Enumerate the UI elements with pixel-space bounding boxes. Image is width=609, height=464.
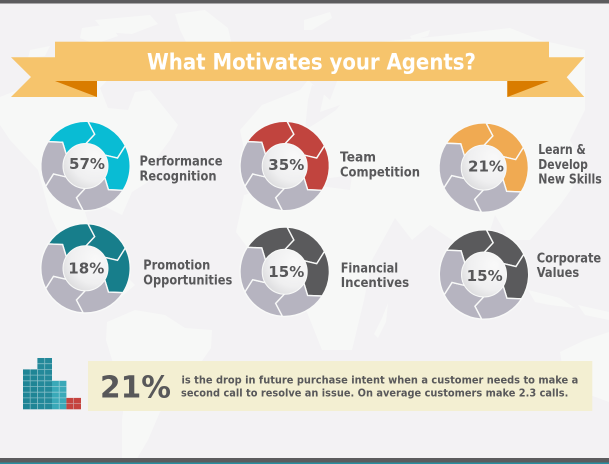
top bar bbox=[0, 0, 609, 4]
label: promotion opportunities: Opportunities bbox=[143, 273, 233, 288]
label: corporate values: Values bbox=[537, 266, 579, 281]
icon: bar chart of tiles bbox=[23, 358, 81, 409]
banner left fold bbox=[55, 81, 97, 97]
label: learn and develop new skills: Learn & bbox=[538, 143, 586, 158]
label: performance recognition bbox=[140, 155, 223, 184]
title: What Motivates your Agents? bbox=[147, 50, 476, 75]
label: performance recognition: Recognition bbox=[140, 170, 216, 184]
label: financial incentives: Incentives bbox=[341, 276, 409, 291]
donut: 57% performance recognition bbox=[27, 109, 144, 223]
donut: 21% learn and develop bbox=[425, 111, 542, 224]
callout text bbox=[181, 374, 578, 400]
label: corporate values bbox=[537, 251, 601, 281]
banner left tail bbox=[11, 57, 97, 97]
label: learn and develop new skills: Develop bbox=[538, 158, 588, 173]
bottom bar bbox=[0, 458, 609, 464]
callout text: second call to resolve an issue. On average customers make 2.3 calls. bbox=[181, 388, 568, 400]
donut: 18% promotion opportunities bbox=[27, 211, 144, 325]
title banner bbox=[11, 42, 584, 97]
banner main strip bbox=[55, 42, 549, 81]
label: financial incentives: Financial bbox=[341, 261, 398, 276]
banner right fold bbox=[507, 81, 549, 97]
value: 35%: 35% bbox=[268, 156, 304, 174]
label: learn and develop new skills bbox=[538, 143, 602, 187]
callout figure: 21% bbox=[100, 370, 171, 405]
banner right tail bbox=[507, 57, 584, 97]
value: 57%: 57% bbox=[69, 155, 105, 173]
donut: 35% team competition bbox=[226, 109, 343, 223]
donut: 15% financial incentives bbox=[226, 215, 343, 329]
label: corporate values: Corporate bbox=[537, 251, 601, 266]
label: promotion opportunities: Promotion bbox=[143, 258, 210, 273]
label: team competition: Competition bbox=[340, 166, 420, 181]
label: team competition: Team bbox=[340, 151, 376, 166]
label: team competition bbox=[340, 151, 420, 181]
callout panel bbox=[88, 361, 592, 411]
donut: 15% corporate values bbox=[425, 218, 543, 331]
value: 21%: 21% bbox=[468, 157, 504, 175]
label: promotion opportunities bbox=[143, 258, 233, 288]
callout text: is the drop in future purchase intent when a customer needs to make a bbox=[182, 374, 578, 386]
label: financial incentives bbox=[341, 261, 409, 291]
value: 15%: 15% bbox=[467, 267, 503, 285]
value: 15%: 15% bbox=[268, 263, 304, 281]
label: performance recognition: Performance bbox=[140, 155, 223, 170]
value: 18%: 18% bbox=[68, 260, 104, 278]
